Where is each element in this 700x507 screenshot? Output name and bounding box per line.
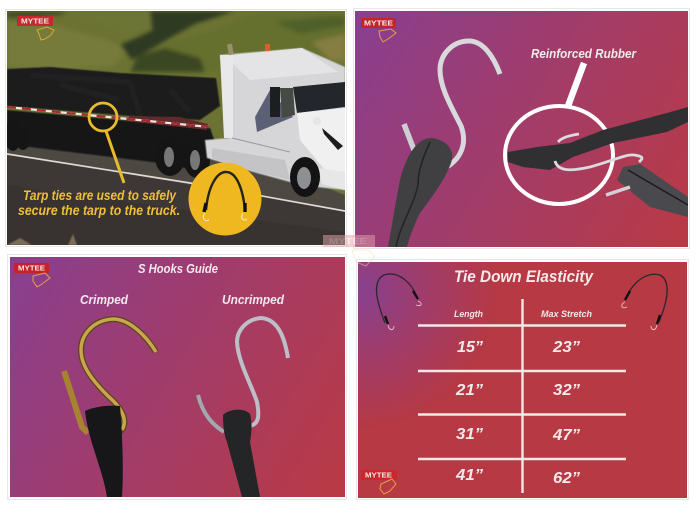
connecting hook xyxy=(555,134,642,170)
rubber strap, uncrimped xyxy=(223,410,260,497)
tarp tie icon circle xyxy=(188,162,262,236)
truck cab xyxy=(205,44,345,197)
hook tail xyxy=(404,124,414,150)
black strap, crimped xyxy=(85,406,123,497)
label: uncrimped: Uncrimped xyxy=(222,293,284,307)
table headers: Max Stretch xyxy=(541,309,592,320)
brass hook xyxy=(64,319,156,434)
callout label: Reinforced Rubber xyxy=(531,47,637,61)
trailer wheels xyxy=(5,119,210,178)
hills xyxy=(7,11,345,72)
table grid xyxy=(418,299,626,493)
lower strap xyxy=(617,164,688,217)
panel: S hooks guide xyxy=(10,257,345,497)
callout ring and pointer xyxy=(89,103,124,183)
callout circle xyxy=(505,106,613,204)
table headers xyxy=(454,309,592,320)
caption xyxy=(18,188,180,218)
table values: length: 41” xyxy=(455,467,483,484)
label: crimped: Crimped xyxy=(80,293,128,307)
heading: Tie Down Elasticity xyxy=(454,267,594,286)
table values: max stretch: 23” xyxy=(552,339,580,356)
tie down icon left xyxy=(377,274,421,330)
rubber strap right xyxy=(508,107,688,170)
table values: max stretch: 62” xyxy=(553,470,580,487)
tie down icon right xyxy=(622,274,667,330)
table values: length: 31” xyxy=(456,426,483,443)
logo: MYTEE xyxy=(18,264,45,272)
table values: length: 15” xyxy=(457,339,483,356)
panel: tie down elasticity xyxy=(358,262,687,498)
table values: max stretch xyxy=(552,339,580,487)
caption: Tarp ties are used to safely xyxy=(23,188,177,203)
trailer rail xyxy=(7,107,209,127)
table headers: Length xyxy=(454,309,483,320)
logo xyxy=(361,470,397,494)
table values: length xyxy=(455,339,483,484)
table values: max stretch: 47” xyxy=(552,427,580,444)
caption: secure the tarp to the truck. xyxy=(18,203,180,218)
logo xyxy=(361,18,396,42)
logo xyxy=(14,263,50,287)
logo: MYTEE xyxy=(364,18,393,28)
panel: truck photo xyxy=(5,11,345,245)
logo xyxy=(17,16,54,40)
rubber strap left xyxy=(388,138,452,247)
S hook xyxy=(440,41,500,170)
heading: S Hooks Guide xyxy=(138,262,218,276)
steel hook xyxy=(198,318,288,432)
table values: length: 21” xyxy=(455,382,483,399)
tarp xyxy=(7,67,220,120)
trailer underside xyxy=(7,110,216,172)
panel: reinforced rubber xyxy=(355,11,688,247)
road xyxy=(7,150,345,232)
table values: max stretch: 32” xyxy=(553,382,580,399)
logo: MYTEE xyxy=(21,16,49,26)
watermark xyxy=(323,235,375,266)
watermark: MYTEE xyxy=(329,237,368,246)
callout stem xyxy=(568,63,584,106)
logo: MYTEE xyxy=(365,470,392,480)
